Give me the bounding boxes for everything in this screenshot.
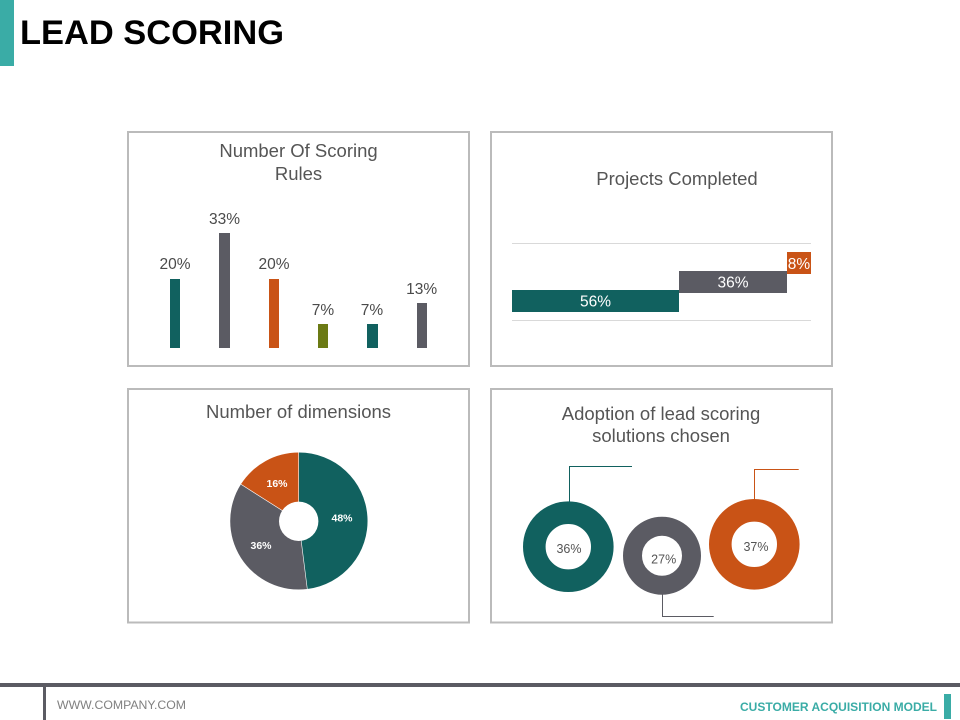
donut: 36%: 36%: [556, 542, 582, 556]
donut chart: dimensions: 36%: [250, 540, 272, 552]
panel: number of scoring rules: [128, 132, 469, 366]
footer model name: CUSTOMER ACQUISITION MODEL: [740, 700, 937, 714]
panel: projects completed: [491, 132, 832, 366]
donut chart: dimensions: 48%: [331, 513, 353, 525]
donut chart: dimensions: 16%: [266, 478, 288, 490]
title accent bar: [0, 0, 14, 66]
stepped bar chart: projects completed: 56%: [580, 294, 611, 311]
bar chart: scoring rules: [159, 211, 437, 348]
bar chart: scoring rules: 20%: [258, 256, 290, 273]
donut: 27%: 27%: [651, 553, 676, 567]
bar chart: scoring rules: 13%: [406, 281, 437, 298]
heading: adoption of lead scoring: Adoption of lead scoring: [562, 403, 760, 424]
donut: 27%: [632, 526, 714, 616]
panel: number of dimensions: [128, 389, 469, 622]
title: LEAD SCORING: [20, 14, 284, 52]
donut: 37%: [720, 470, 799, 578]
panel: adoption of lead scoring: [491, 389, 832, 622]
bar chart: scoring rules: 7%: [361, 302, 383, 319]
stepped bar chart: projects completed: 8%: [788, 256, 810, 273]
bar chart: scoring rules: 33%: [209, 211, 240, 228]
bar chart: scoring rules: 7%: [312, 302, 334, 319]
donut: 36%: [534, 466, 632, 581]
heading: projects completed: Projects Completed: [596, 168, 758, 189]
heading: adoption of lead scoring: solutions chosen: [592, 425, 730, 446]
heading: number of dimensions: Number of dimensions: [206, 401, 391, 422]
footer: [0, 683, 960, 720]
donut chart: dimensions: [230, 452, 368, 590]
donut: 37%: 37%: [743, 540, 769, 554]
stepped bar chart: projects completed: [512, 252, 811, 312]
footer website: WWW.COMPANY.COM: [57, 698, 186, 712]
heading: number of scoring rules: Rules: [275, 163, 322, 184]
stepped bar chart: projects completed: 36%: [717, 275, 749, 292]
heading: number of scoring rules: Number Of Scoring: [219, 140, 378, 161]
bar chart: scoring rules: 20%: [159, 256, 191, 273]
